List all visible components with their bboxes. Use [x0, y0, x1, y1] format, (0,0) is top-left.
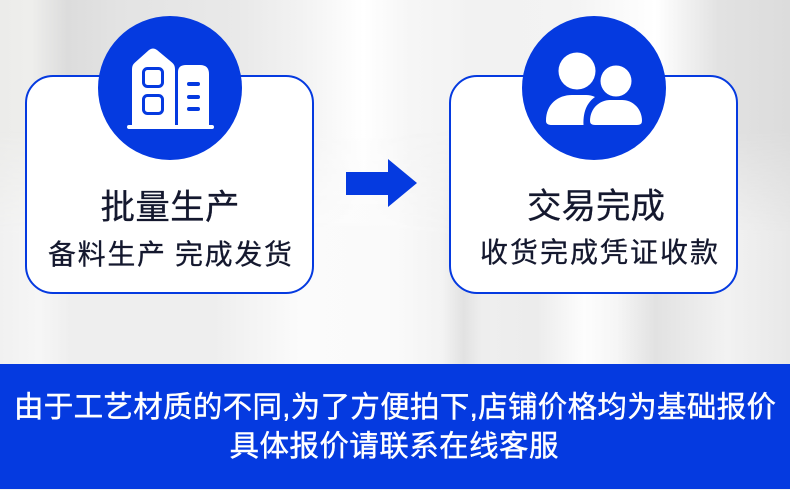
- circle badge: [522, 16, 666, 160]
- circle badge: [98, 16, 242, 160]
- icon: two people: [546, 52, 642, 125]
- text: prepare materials and ship: 备料生产: [48, 239, 165, 270]
- silver brushed background: [0, 0, 790, 364]
- card outline: [450, 76, 737, 293]
- text: receipt voucher and payment: 收货完成凭证收款: [480, 237, 718, 268]
- footer band: [0, 364, 790, 489]
- text: prepare materials and ship: [48, 239, 292, 270]
- heading: batch production: 批量生产: [100, 189, 240, 227]
- panel: batch production: [26, 16, 313, 293]
- icon: factory buildings: [127, 48, 214, 129]
- heading: transaction complete: 交易完成: [527, 188, 665, 226]
- arrow: [346, 159, 417, 207]
- footer line 1: 由于工艺材质的不同,为了方便拍下,店铺价格均为基础报价: [14, 391, 776, 424]
- footer line 2: 具体报价请联系在线客服: [230, 430, 558, 463]
- text: prepare materials and ship: 完成发货: [175, 239, 292, 270]
- card outline: [26, 76, 313, 293]
- panel: transaction complete: [450, 16, 737, 293]
